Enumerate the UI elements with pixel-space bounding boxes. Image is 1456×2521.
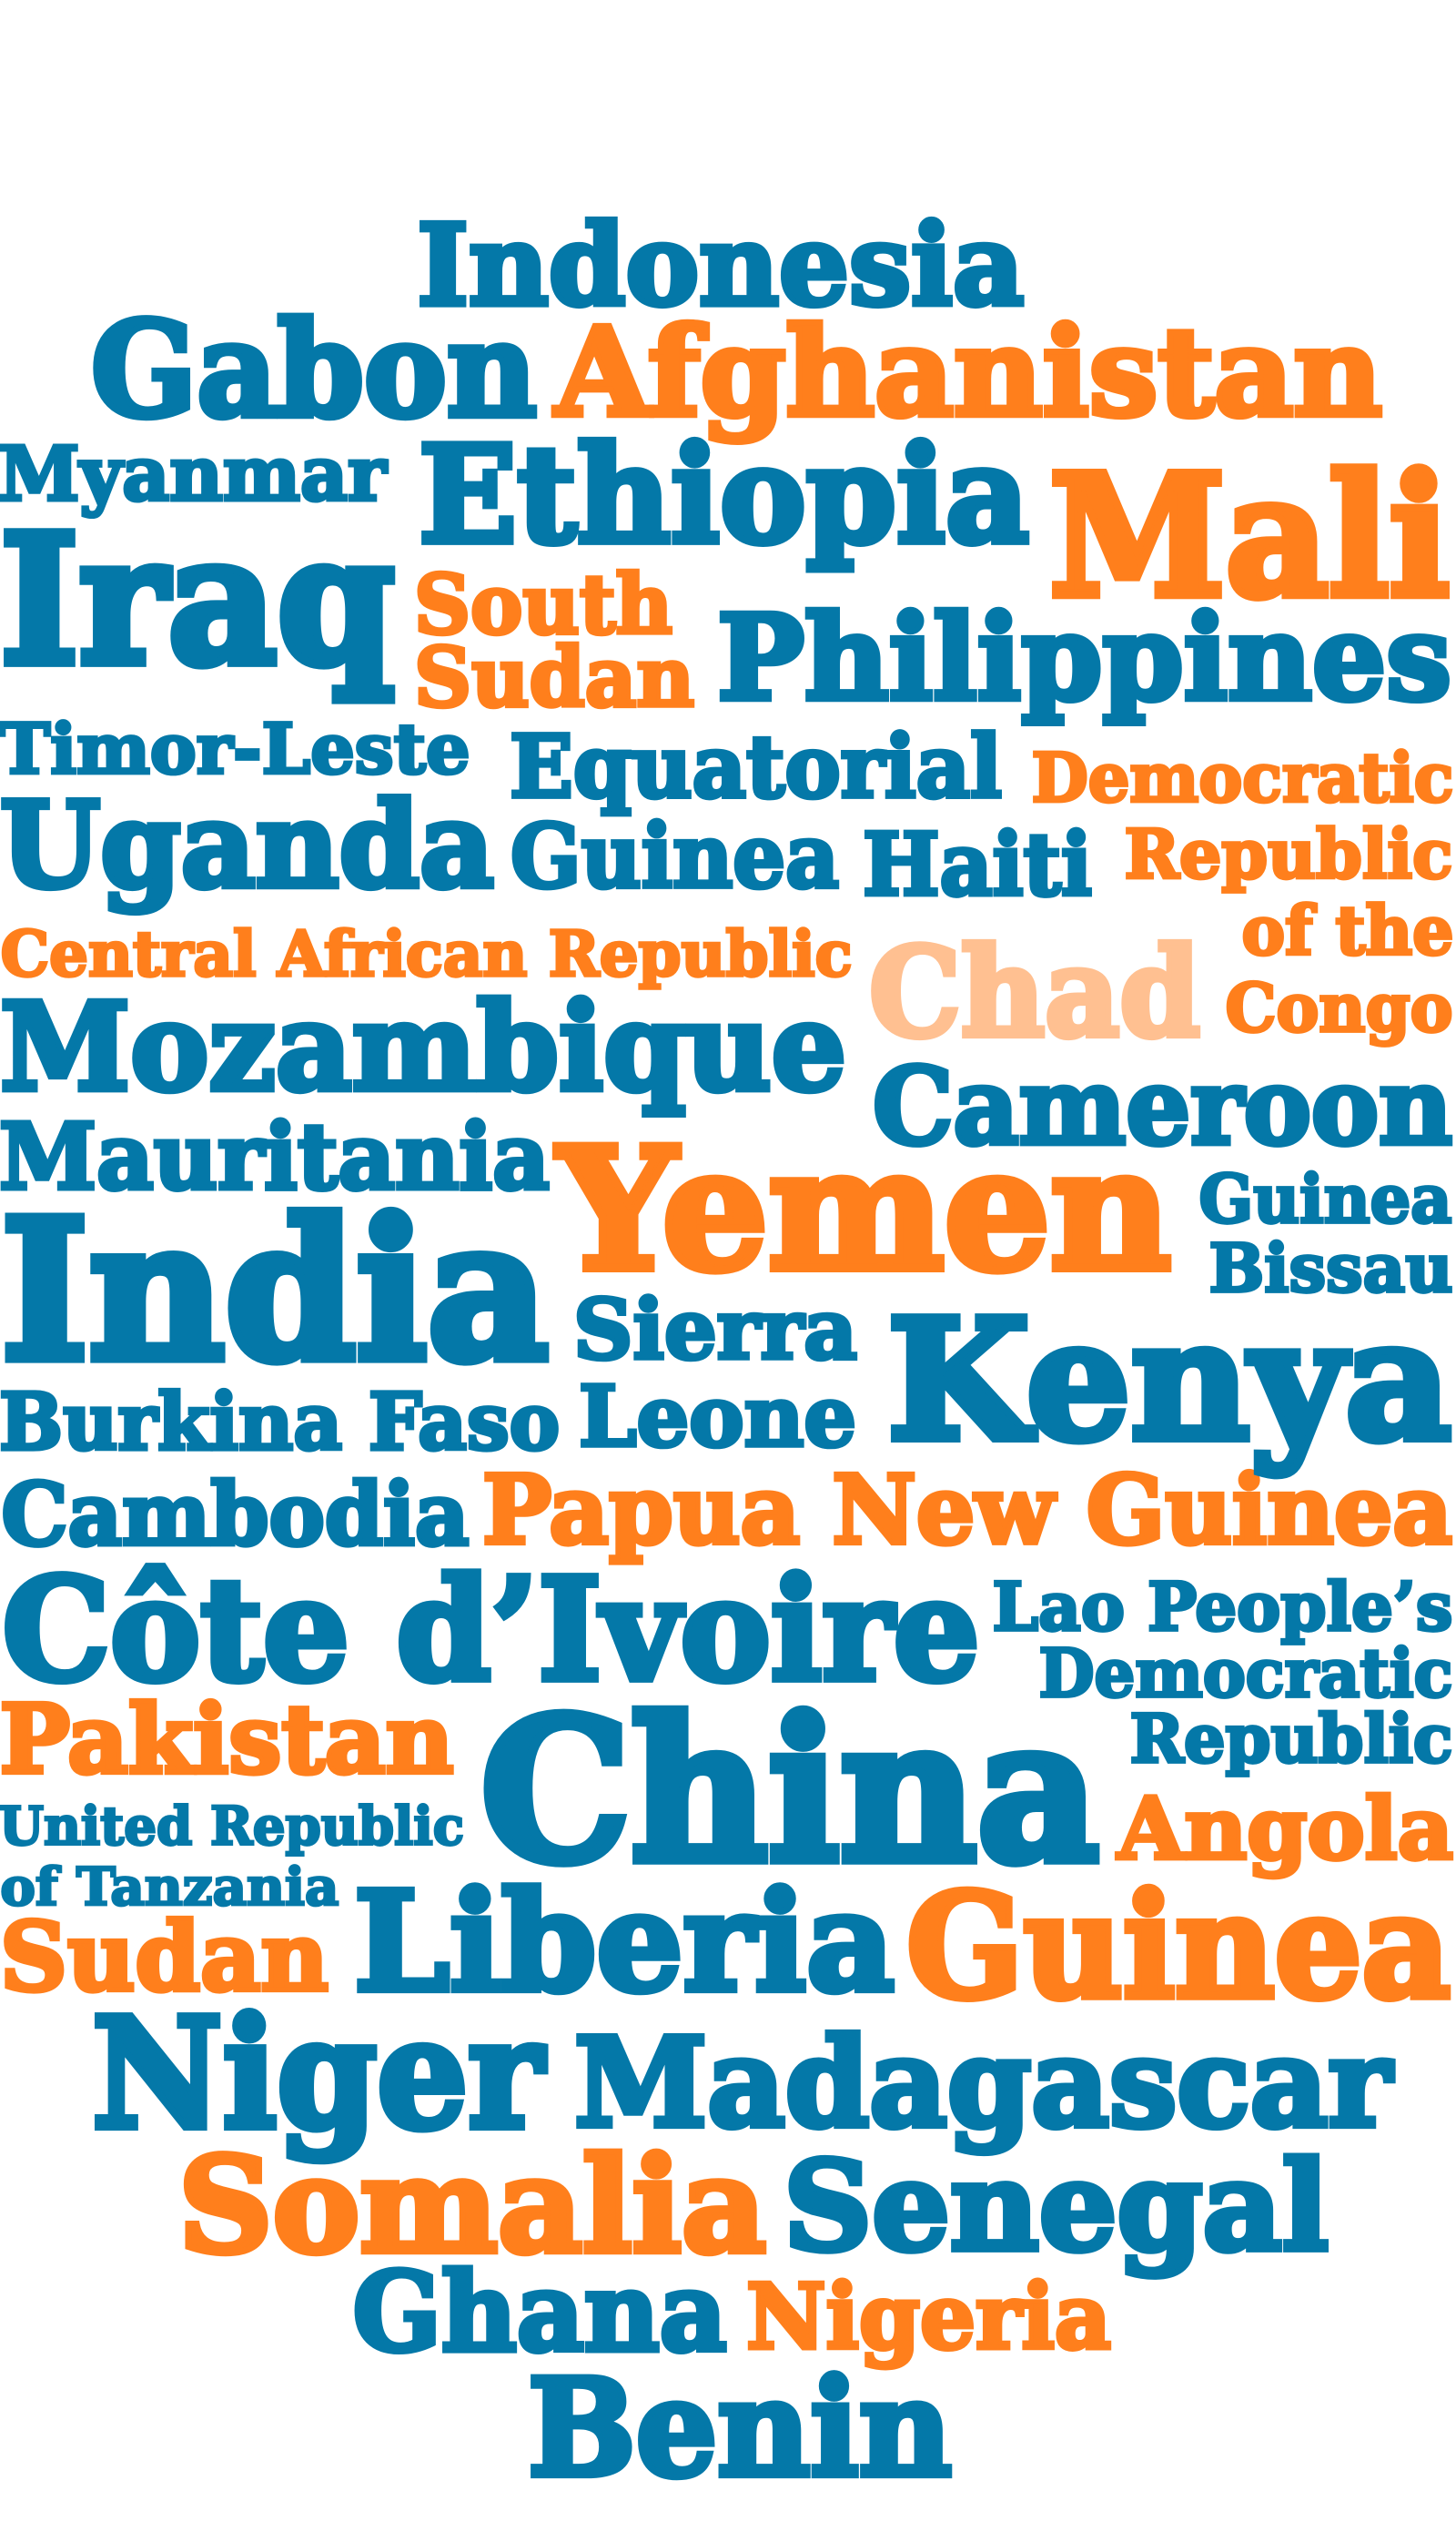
word: South: South bbox=[414, 556, 672, 653]
word: Cambodia: Cambodia bbox=[2, 1464, 470, 1565]
word: Mozambique: Mozambique bbox=[0, 977, 846, 1119]
word: Somalia: Somalia bbox=[178, 2129, 766, 2283]
word: Madagascar: Madagascar bbox=[574, 2010, 1393, 2155]
word: Benin: Benin bbox=[528, 2350, 952, 2506]
word: Philippines: Philippines bbox=[717, 590, 1451, 727]
word: Lao People's: Lao People’s bbox=[992, 1568, 1452, 1646]
word: Equatorial: Equatorial bbox=[510, 717, 1002, 818]
word: Kenya: Kenya bbox=[887, 1282, 1451, 1477]
word: Indonesia: Indonesia bbox=[417, 200, 1024, 331]
word: Côte d'Ivoire: Côte d’Ivoire bbox=[2, 1546, 979, 1713]
word: China: China bbox=[480, 1675, 1099, 1906]
word: Leone: Leone bbox=[579, 1368, 856, 1466]
word: United Republic: United Republic bbox=[0, 1795, 464, 1857]
word: Afghanistan: Afghanistan bbox=[553, 300, 1382, 444]
word: Democratic (orange): Democratic bbox=[1032, 740, 1454, 818]
word: Uganda: Uganda bbox=[0, 775, 494, 915]
word: India: India bbox=[1, 1177, 549, 1403]
word: Central African Republic: Central African Republic bbox=[1, 918, 853, 991]
word: Sierra: Sierra bbox=[573, 1281, 857, 1378]
word: Pakistan: Pakistan bbox=[0, 1686, 453, 1796]
word: Nigeria: Nigeria bbox=[746, 2265, 1111, 2370]
word: Niger: Niger bbox=[92, 1985, 545, 2163]
word: Democratic (blue): Democratic bbox=[1039, 1635, 1452, 1713]
word: Senegal: Senegal bbox=[784, 2133, 1329, 2279]
word: Ethiopia: Ethiopia bbox=[419, 416, 1029, 573]
word: Gabon: Gabon bbox=[91, 293, 537, 447]
word: Congo: Congo bbox=[1225, 969, 1452, 1048]
word: Haiti: Haiti bbox=[863, 815, 1092, 916]
word: Sudan (South Sudan): Sudan bbox=[414, 629, 694, 725]
word: Guinea (Equatorial Guinea): Guinea bbox=[511, 805, 839, 908]
word: Guinea (Guinea Bissau): Guinea bbox=[1199, 1160, 1452, 1239]
word: Timor-Leste: Timor-Leste bbox=[0, 709, 470, 790]
word: Liberia: Liberia bbox=[354, 1862, 895, 2022]
word: Bissau: Bissau bbox=[1208, 1230, 1452, 1308]
word: Burkina Faso: Burkina Faso bbox=[0, 1376, 560, 1468]
word: Iraq: Iraq bbox=[0, 496, 395, 705]
word: Sudan: Sudan bbox=[0, 1903, 329, 2013]
word: Yemen: Yemen bbox=[556, 1111, 1171, 1308]
word: Chad: Chad bbox=[869, 920, 1200, 1065]
word: of Tanzania: of Tanzania bbox=[0, 1857, 339, 1918]
word: Angola: Angola bbox=[1117, 1779, 1453, 1879]
word: Republic (orange): Republic bbox=[1125, 816, 1452, 895]
word: Myanmar: Myanmar bbox=[0, 431, 388, 519]
word: Ghana: Ghana bbox=[353, 2248, 727, 2376]
word: Republic (blue): Republic bbox=[1130, 1700, 1452, 1778]
word: Papua New Guinea: Papua New Guinea bbox=[482, 1456, 1452, 1566]
word: Mauritania: Mauritania bbox=[0, 1103, 550, 1210]
word: of the: of the bbox=[1241, 893, 1454, 971]
